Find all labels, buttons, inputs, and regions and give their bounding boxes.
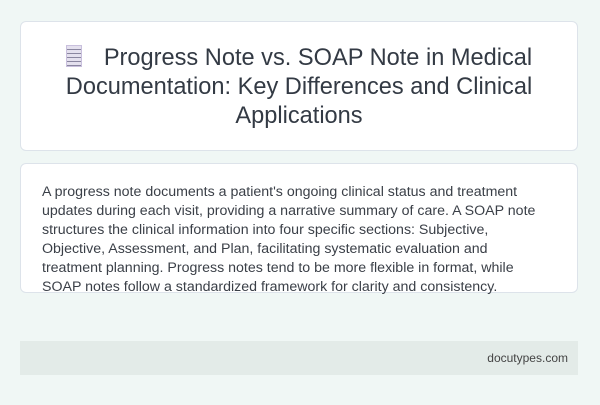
description text: A progress note documents a patient's ongoing clinical status and treatment updates during each visit, providing a narrative summary of care. A SOAP note structures the clinical information into four specific sections: Subjective, Objective, Assessment, and Plan, facilitating systematic evaluation and treatment planning. Progress notes tend to be more flexible in format, while SOAP notes follow a standardized framework for clarity and consistency.	[42, 184, 535, 295]
icon: document	[66, 45, 82, 67]
title card	[20, 21, 578, 151]
description card	[20, 163, 578, 293]
title: Progress Note vs. SOAP Note in Medical Documentation: Key Differences and Clinical Applications	[66, 45, 532, 129]
footer text: docutypes.com	[487, 351, 568, 365]
footer bar	[20, 341, 578, 375]
